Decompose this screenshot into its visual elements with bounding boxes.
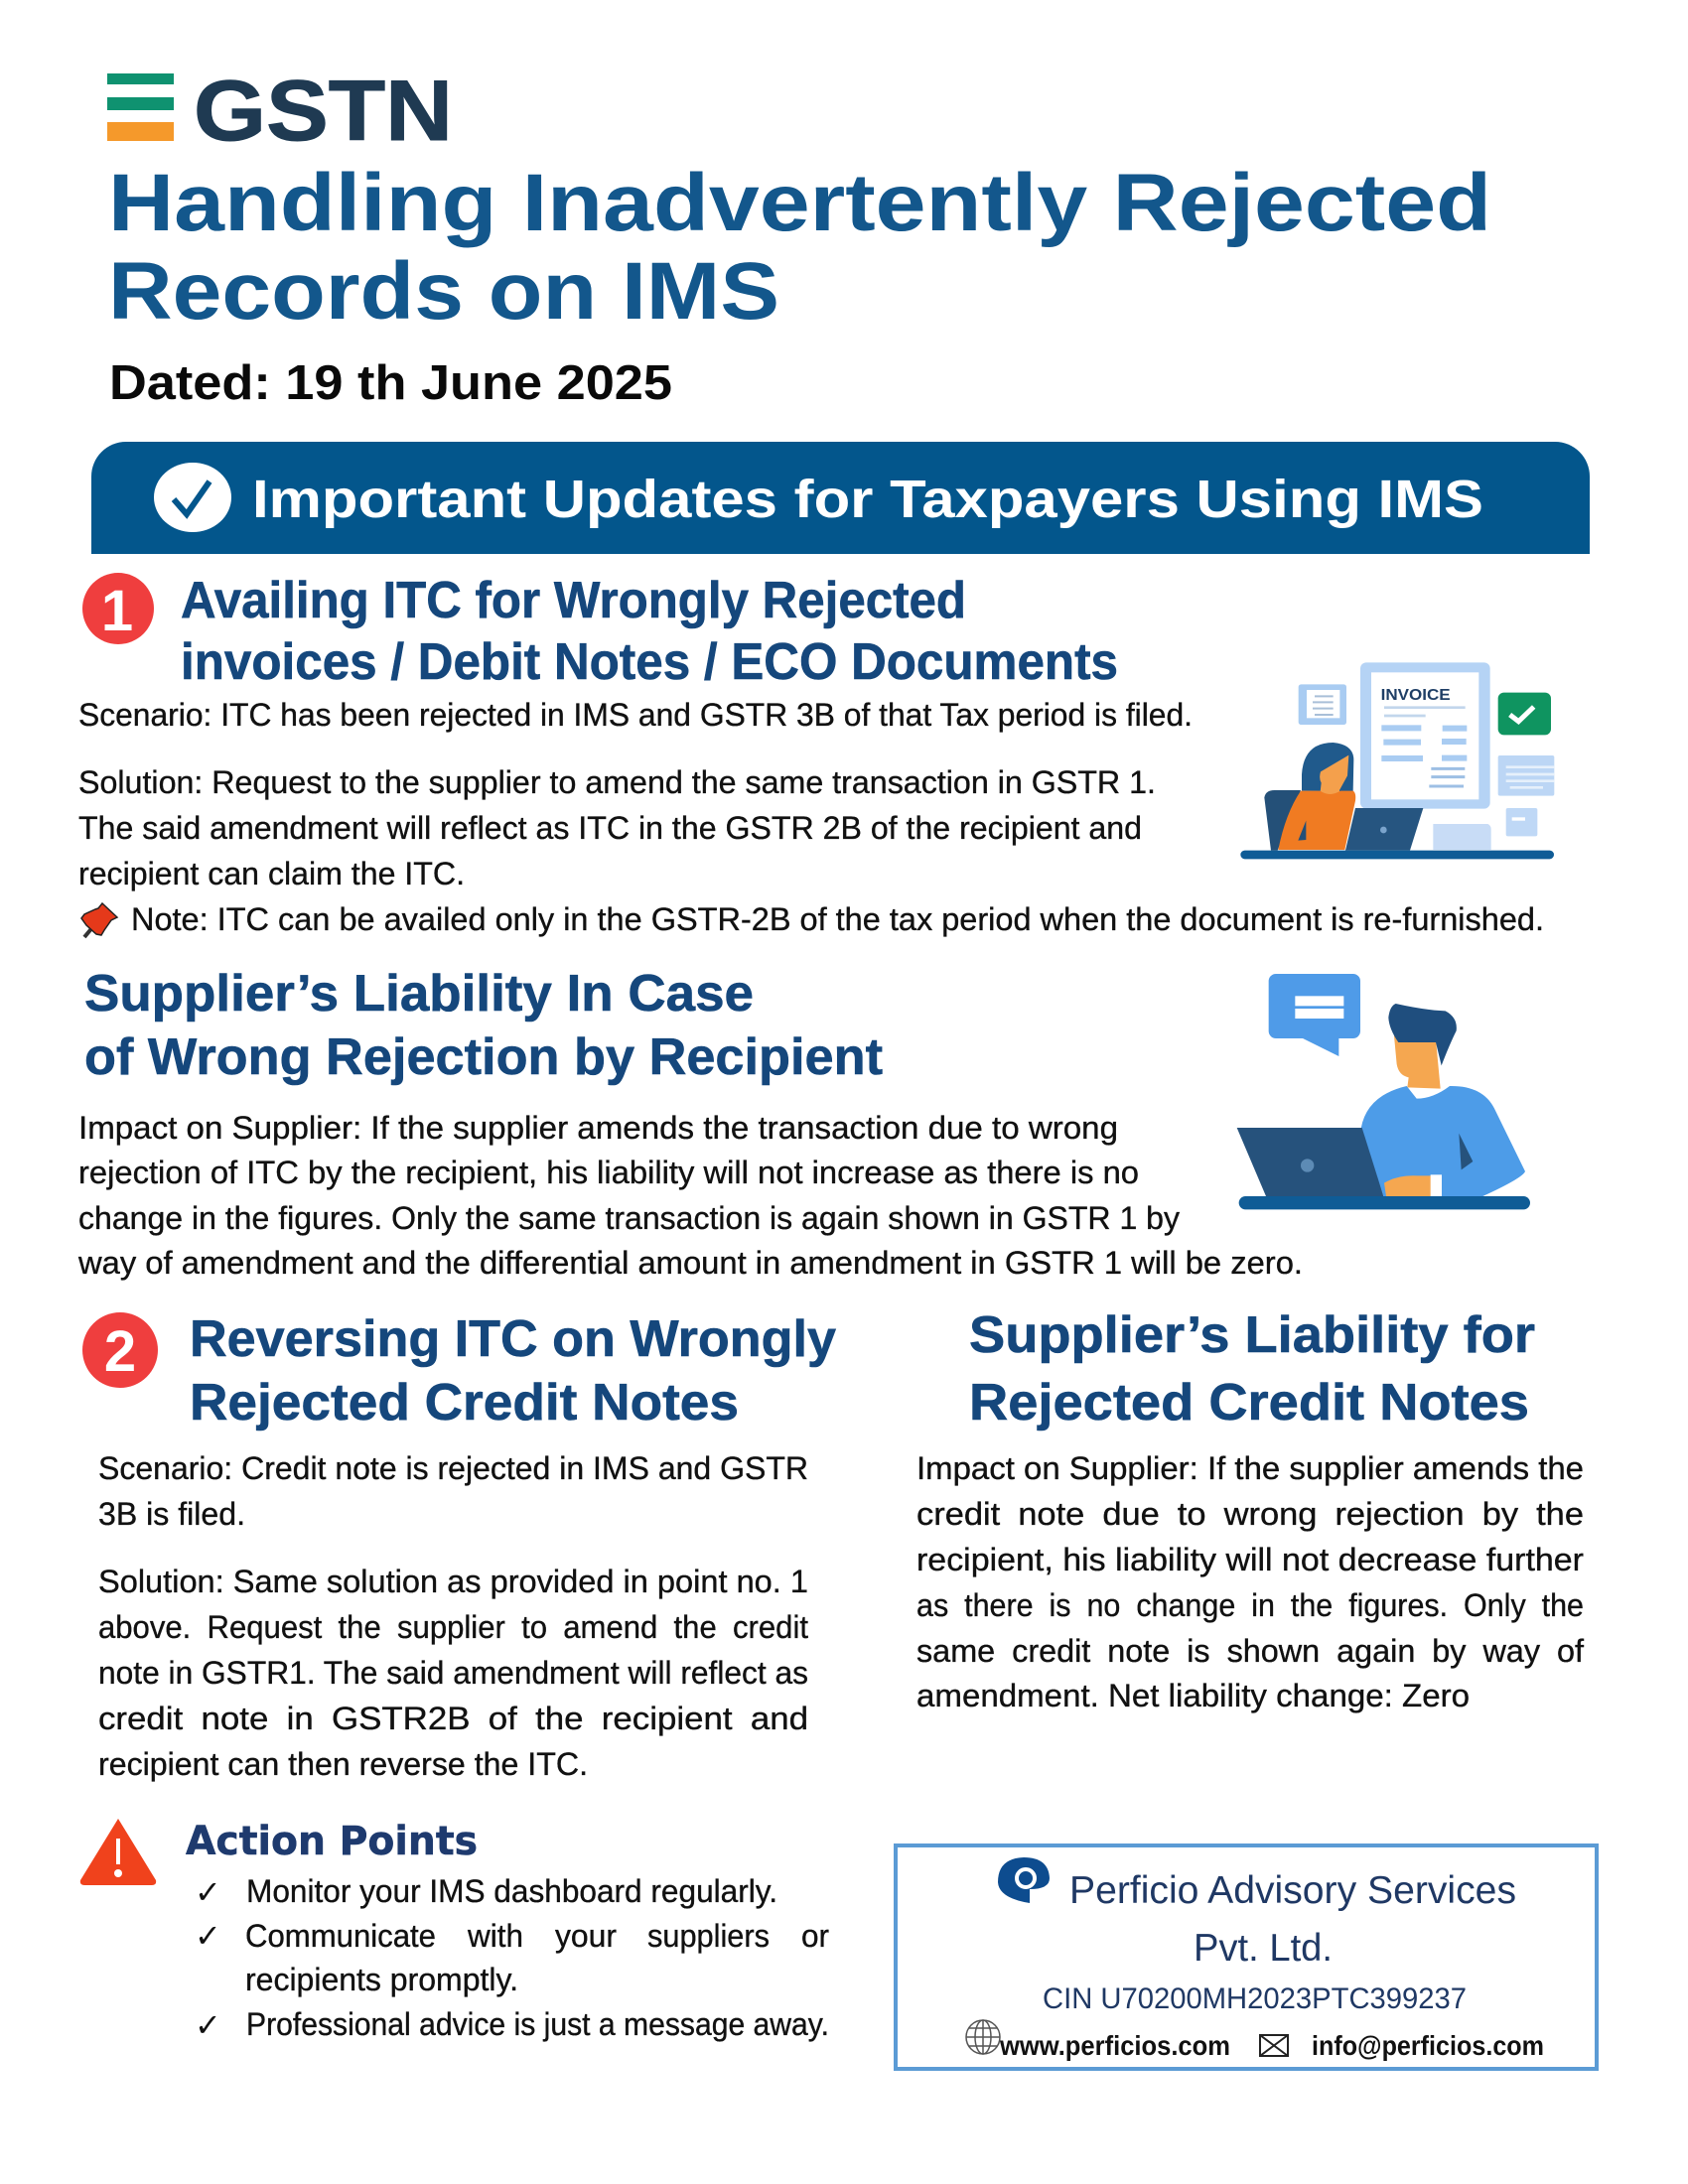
banner: important updates <box>91 442 1590 554</box>
text: impact on supplier: way of amendment and the differential amount in amendment in GSTR 1 will be zero. <box>77 1245 1303 1281</box>
icon: envelope <box>1260 2035 1288 2056</box>
list: action points <box>195 1873 829 2044</box>
panel: Perficio contact box: Pvt. Ltd. <box>1194 1927 1333 1970</box>
badge: number 2 <box>82 1312 158 1388</box>
text: impact on supplier, credit notes: same credit note is shown again by way of <box>916 1633 1585 1669</box>
banner: important updates: Important Updates for Taxpayers Using IMS <box>252 470 1483 529</box>
illustration: man at laptop <box>1237 974 1530 1209</box>
list: action points: ✓ <box>195 1873 221 1911</box>
panel: Perficio contact box: info@perficios.com <box>1312 2030 1544 2061</box>
text: impact on supplier, credit notes: amendment. Net liability change: Zero <box>916 1678 1470 1713</box>
text: scenario and solution <box>78 697 1193 891</box>
text: impact on supplier <box>77 1110 1303 1281</box>
panel: Perficio contact box: Perficio Advisory Services <box>1069 1869 1516 1912</box>
text: credit note scenario and solution: Solution: Same solution as provided in point no. 1 <box>98 1564 808 1599</box>
title <box>108 158 1491 337</box>
badge: number 2: 2 <box>104 1319 136 1384</box>
heading: supplier's liability for rejected credit notes: Supplier’s Liability for <box>969 1306 1535 1364</box>
text: scenario and solution: Solution: Request to the supplier to amend the same transaction in GSTR 1. <box>78 764 1156 800</box>
panel: Perficio contact box: CIN U70200MH2023PTC399237 <box>1043 1982 1467 2015</box>
text: credit note scenario and solution: recipient can then reverse the ITC. <box>98 1746 588 1782</box>
text: scenario and solution: recipient can claim the ITC. <box>78 856 465 891</box>
heading: action points: Action Points <box>186 1819 478 1864</box>
text: scenario and solution: The said amendment will reflect as ITC in the GSTR 2B of the recipient and <box>78 810 1142 846</box>
icon: pushpin <box>81 903 117 937</box>
heading: availing ITC <box>181 572 1118 691</box>
list: action points: suppliers <box>647 1918 770 1954</box>
logo: GSTN: GSTN <box>194 64 453 159</box>
badge: number 1: 1 <box>101 579 133 643</box>
list: action points: your <box>555 1918 617 1954</box>
icon: globe <box>966 2020 1000 2054</box>
heading: reversing ITC: Rejected Credit Notes <box>190 1374 739 1432</box>
date line: Dated: 19 th June 2025 <box>109 356 672 410</box>
heading: availing ITC: Availing ITC for Wrongly Rejected <box>181 572 966 629</box>
panel: Perficio contact box <box>896 1845 1597 2069</box>
text: note: Note: ITC can be availed only in the GSTR-2B of the tax period when the document is re-furnished. <box>131 901 1544 937</box>
heading: reversing ITC <box>190 1310 836 1432</box>
panel: Perficio contact box: www.perficios.com <box>999 2030 1230 2061</box>
text: credit note scenario and solution: 3B is filed. <box>98 1496 245 1532</box>
text: impact on supplier: change in the figures. Only the same transaction is again shown in GSTR 1 by <box>78 1200 1181 1236</box>
heading: supplier's liability <box>84 965 883 1086</box>
list: action points: ✓ <box>195 1917 221 1955</box>
illustration: invoice with woman at laptop <box>1240 662 1554 859</box>
text: impact on supplier, credit notes: as there is no change in the figures. Only the <box>916 1587 1584 1623</box>
text: scenario and solution: Scenario: ITC has been rejected in IMS and GSTR 3B of that Tax period is filed. <box>78 697 1193 733</box>
text: credit note scenario and solution <box>98 1450 808 1782</box>
heading: supplier's liability for rejected credit notes <box>969 1306 1535 1432</box>
heading: availing ITC: invoices / Debit Notes / ECO Documents <box>181 633 1118 691</box>
text: impact on supplier: Impact on Supplier: If the supplier amends the transaction due to wrong <box>78 1110 1118 1146</box>
text: credit note scenario and solution: Scenario: Credit note is rejected in IMS and GSTR <box>98 1450 808 1486</box>
list: action points: ✓ <box>195 2006 221 2044</box>
text: credit note scenario and solution: credit note in GSTR2B of the recipient and <box>98 1701 808 1736</box>
badge: number 1 <box>82 573 154 644</box>
title: Records on IMS <box>108 246 779 337</box>
text: impact on supplier, credit notes: Impact on Supplier: If the supplier amends the <box>916 1450 1584 1486</box>
heading: supplier's liability: Supplier’s Liability In Case <box>84 965 754 1023</box>
heading: supplier's liability: of Wrong Rejection by Recipient <box>84 1028 883 1086</box>
icon: speech bubble <box>1269 974 1360 1056</box>
list: action points: Communicate <box>245 1918 436 1954</box>
heading: supplier's liability for rejected credit notes: Rejected Credit Notes <box>969 1374 1529 1432</box>
logo: GSTN <box>107 64 453 159</box>
icon: check circle <box>154 463 231 532</box>
text: credit note scenario and solution: above. Request the supplier to amend the credit <box>98 1609 808 1645</box>
text: impact on supplier, credit notes: credit note due to wrong rejection by the <box>916 1496 1584 1532</box>
list: action points: Monitor your IMS dashboard regularly. <box>246 1873 777 1909</box>
list: action points: recipients promptly. <box>245 1962 518 1997</box>
text: impact on supplier, credit notes <box>916 1450 1585 1713</box>
list: action points: Professional advice is just a message away. <box>246 2006 829 2042</box>
title: Handling Inadvertently Rejected <box>108 158 1491 248</box>
heading: reversing ITC: Reversing ITC on Wrongly <box>190 1310 836 1368</box>
illustration: invoice with woman at laptop: INVOICE <box>1381 687 1451 704</box>
text: impact on supplier: rejection of ITC by the recipient, his liability will not increase as there is no <box>78 1155 1139 1190</box>
icon: warning triangle <box>80 1819 156 1885</box>
text: credit note scenario and solution: note in GSTR1. The said amendment will reflect as <box>98 1655 808 1691</box>
icon: Perficio swirl logo <box>998 1857 1050 1903</box>
list: action points: or <box>801 1918 829 1954</box>
text: impact on supplier, credit notes: recipient, his liability will not decrease further <box>916 1542 1584 1577</box>
list: action points: with <box>467 1918 523 1954</box>
